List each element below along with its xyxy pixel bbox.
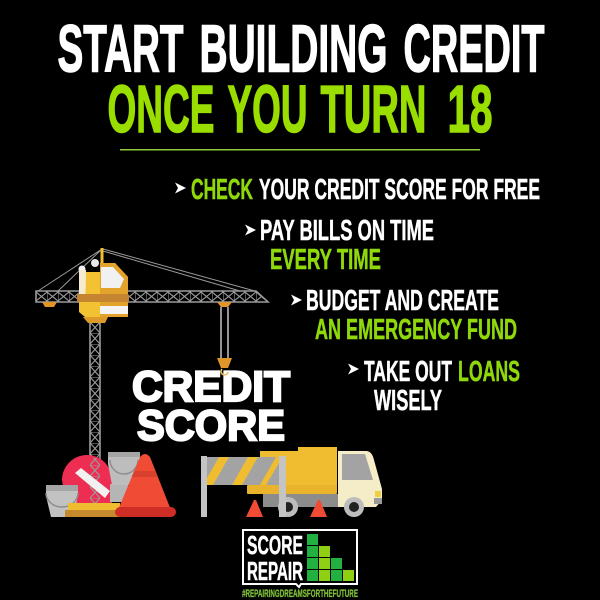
tip 2: pay bills on time — [245, 215, 434, 276]
tip 2: pay bills on time: PAY BILLS ON TIME — [260, 215, 434, 247]
tip 1: check credit score — [175, 174, 540, 206]
icon: road barrier — [201, 456, 286, 517]
tip 4: take out loans wisely — [348, 356, 520, 417]
title: 18 — [448, 72, 492, 147]
title: ONCE — [108, 72, 214, 147]
tip 2: pay bills on time: EVERY TIME — [270, 244, 381, 276]
title: YOU — [228, 72, 308, 147]
title: START — [58, 12, 184, 86]
heading: credit score: SCORE — [137, 402, 285, 450]
heading: credit score: CREDIT — [132, 363, 290, 411]
tip 4: take out loans wisely: LOANS — [458, 356, 520, 388]
tip 1: check credit score: CHECK — [191, 174, 253, 206]
logo: score repair: SCORE — [247, 530, 303, 560]
tip 3: budget and emergency fund — [291, 285, 517, 346]
tip 4: take out loans wisely: WISELY — [374, 385, 442, 417]
logo: score repair: REPAIR — [247, 556, 303, 586]
title: BUILDING — [200, 12, 388, 86]
icon: construction crane — [36, 248, 268, 504]
title — [58, 12, 545, 147]
logo: score repair — [243, 530, 357, 587]
icon: small cones — [246, 500, 327, 517]
icon: truck — [247, 447, 382, 517]
title: TURN — [320, 72, 426, 147]
icon: construction materials — [46, 452, 176, 517]
logo squares — [307, 534, 354, 581]
hashtag: #REPAIRINGDREAMSFORTHEFUTURE — [242, 588, 358, 600]
tip 4: take out loans wisely: TAKE OUT — [364, 356, 452, 388]
heading: credit score — [132, 363, 290, 450]
